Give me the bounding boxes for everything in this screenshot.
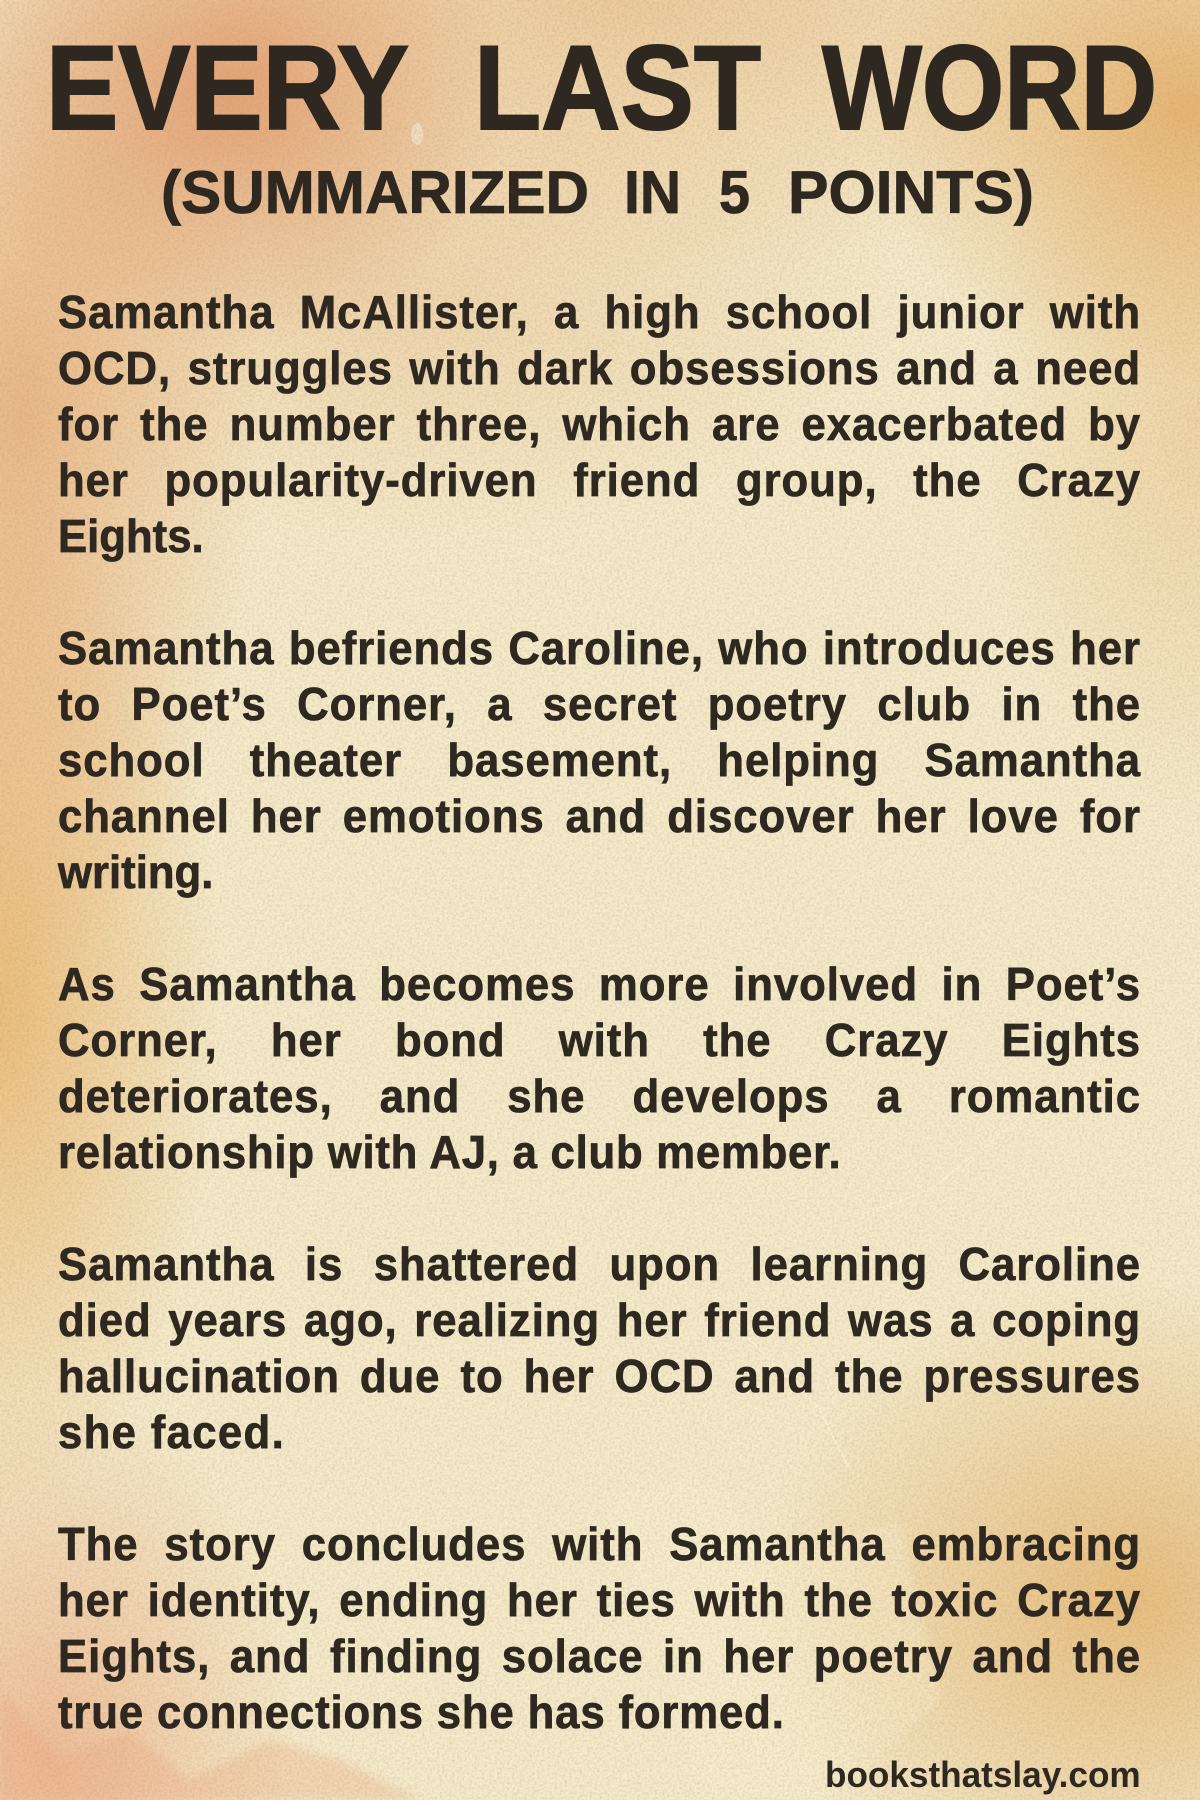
point 5: [58, 1518, 1141, 1738]
point 2: to Poet’s Corner, a secret poetry club in the: [58, 678, 1141, 730]
point 2: writing.: [58, 846, 213, 898]
title: LAST: [474, 21, 761, 155]
subtitle: IN: [624, 159, 681, 226]
point 2: school theater basement, helping Samantha: [58, 734, 1141, 786]
title: EVERY: [46, 21, 409, 155]
point 3: Corner, her bond with the Crazy Eights: [58, 1014, 1141, 1066]
point 1: Eights.: [58, 510, 204, 562]
point 5: The story concludes with Samantha embracing: [58, 1518, 1141, 1570]
point 4: she faced.: [58, 1406, 285, 1458]
point 2: [58, 622, 1141, 898]
title: WORD: [822, 21, 1157, 155]
point 4: Samantha is shattered upon learning Caroline: [58, 1238, 1141, 1290]
point 4: [58, 1238, 1141, 1458]
point 3: [58, 958, 1141, 1178]
subtitle: 5: [719, 159, 750, 226]
point 1: her popularity-driven friend group, the Crazy: [58, 454, 1141, 506]
website credit: booksthatslay.com: [825, 1754, 1141, 1795]
point 4: hallucination due to her OCD and the pressures: [58, 1350, 1141, 1402]
point 3: deteriorates, and she develops a romantic: [58, 1070, 1141, 1122]
point 5: her identity, ending her ties with the toxic Crazy: [58, 1574, 1141, 1626]
point 5: Eights, and finding solace in her poetry and the: [58, 1630, 1141, 1682]
point 3: As Samantha becomes more involved in Poet’s: [58, 958, 1141, 1010]
point 5: true connections she has formed.: [58, 1686, 785, 1738]
point 3: relationship with AJ, a club member.: [58, 1126, 841, 1178]
title: [46, 21, 1157, 155]
subtitle: (SUMMARIZED: [161, 159, 589, 226]
subtitle: [161, 159, 1034, 226]
point 1: for the number three, which are exacerbated by: [58, 398, 1141, 450]
point 4: died years ago, realizing her friend was a coping: [58, 1294, 1141, 1346]
point 1: Samantha McAllister, a high school junior with: [58, 286, 1141, 338]
point 2: channel her emotions and discover her love for: [58, 790, 1141, 842]
point 1: [58, 286, 1141, 562]
point 2: Samantha befriends Caroline, who introduces her: [58, 622, 1141, 674]
subtitle: POINTS): [788, 159, 1034, 226]
point 1: OCD, struggles with dark obsessions and a need: [58, 342, 1141, 394]
